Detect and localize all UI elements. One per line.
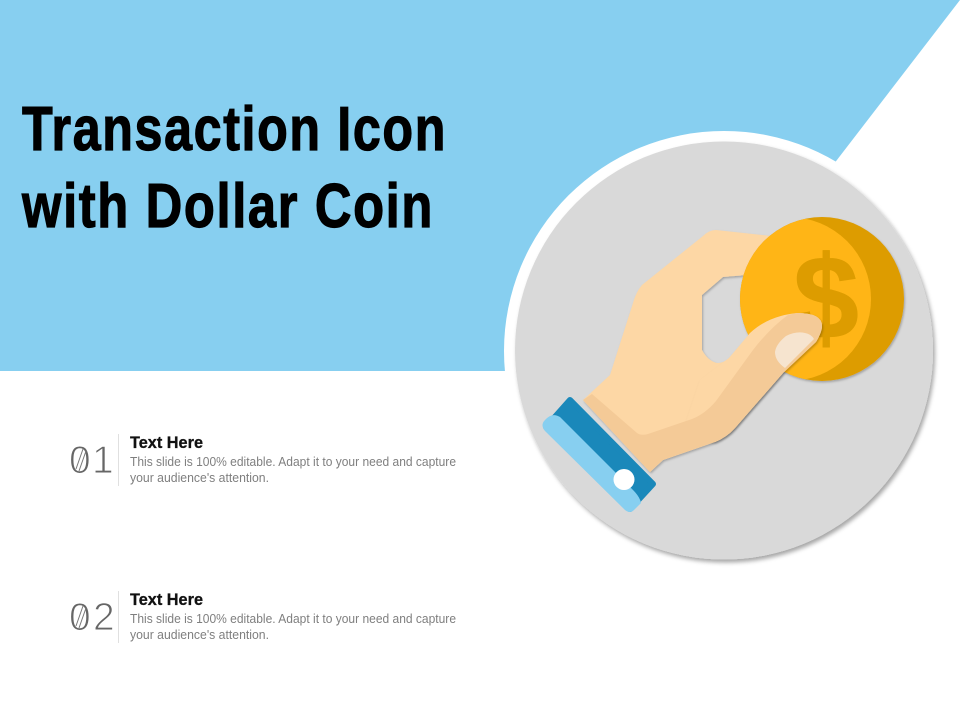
grey circle (515, 142, 933, 560)
list item 02 (69, 590, 456, 643)
number 02: 02 (69, 596, 115, 639)
heading 02: Text Here (130, 590, 203, 609)
description 02: This slide is 100% editable. Adapt it to your need and capture (130, 612, 456, 626)
shirt cuff (546, 400, 653, 509)
dollar sign: $ (793, 232, 859, 364)
description 02: your audience's attention. (130, 628, 269, 642)
title: Transaction Icon (22, 95, 447, 164)
thumb nail (775, 332, 814, 368)
description 01: This slide is 100% editable. Adapt it to your need and capture (130, 455, 456, 469)
hand palm and index finger (583, 230, 800, 472)
title (21, 95, 447, 241)
cuff light strip (542, 415, 641, 512)
number 01: 01 (69, 439, 114, 482)
white ring around circle (504, 131, 944, 571)
cuff button (614, 469, 634, 490)
panel: blue header background (0, 0, 960, 371)
description 02 (130, 612, 456, 642)
heading 01: Text Here (130, 433, 203, 452)
list item 01 (69, 433, 456, 486)
hand shading (583, 313, 822, 472)
icon: coin (740, 217, 906, 384)
description 01: your audience's attention. (130, 471, 269, 485)
description 01 (130, 455, 456, 485)
title: with Dollar Coin (21, 172, 434, 241)
thumb (680, 313, 822, 442)
icon: hand holding dollar coin (542, 217, 904, 512)
